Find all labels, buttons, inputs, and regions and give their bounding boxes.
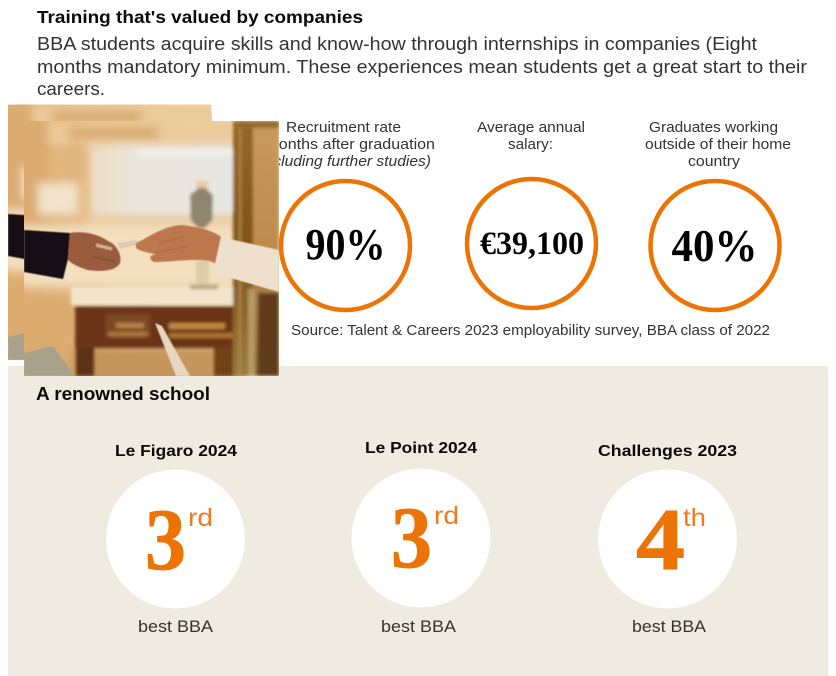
intro paragraph: months mandatory minimum. These experiences mean students get a great start to their (37, 56, 807, 77)
intro paragraph (37, 33, 807, 99)
stat circle: salary: €39,100 (480, 226, 584, 262)
photo: back layer (8, 104, 212, 360)
stat label: recruitment rate: (including further studies) (256, 154, 431, 170)
ranking: Challenges 2023: Challenges 2023 (598, 443, 737, 460)
ranking: Le Figaro 2024 (106, 443, 245, 636)
stat label: graduates abroad (645, 120, 791, 170)
ranking: Challenges 2023 (598, 443, 737, 636)
ranking: Le Figaro 2024: 3 (145, 492, 186, 589)
ranking: Le Figaro 2024: rd (188, 504, 213, 532)
ranking: Le Point 2024 (352, 440, 490, 636)
stat label: graduates abroad: country (688, 154, 741, 170)
panel: a renowned school (8, 366, 828, 676)
ranking: Challenges 2023: 4 (636, 492, 685, 589)
stat label: graduates abroad: Graduates working (649, 120, 778, 136)
stat label: recruitment rate (252, 120, 435, 170)
stat label: recruitment rate: 6 months after graduation (252, 137, 435, 153)
stat label: graduates abroad: outside of their home (645, 137, 791, 153)
intro paragraph: careers. (37, 78, 105, 99)
ranking: Le Figaro 2024: best BBA (138, 617, 214, 636)
stat circle: 90% (281, 181, 410, 310)
stat circle: salary (467, 179, 596, 308)
stat circle: 40%: 40% (672, 220, 758, 271)
ranking: Le Point 2024: Le Point 2024 (365, 440, 477, 457)
stat label: average annual salary: salary: (508, 137, 553, 153)
heading: renowned school: A renowned school (36, 384, 210, 404)
ranking: Le Figaro 2024: Le Figaro 2024 (115, 443, 237, 460)
intro paragraph: BBA students acquire skills and know-how through internships in companies (Eight (37, 33, 757, 54)
ranking: Le Point 2024: 3 (391, 490, 432, 587)
ranking: Le Point 2024: best BBA (381, 617, 457, 636)
ranking: Challenges 2023: best BBA (632, 617, 707, 636)
stat circle: 40% (650, 181, 780, 310)
ranking: Le Point 2024: rd (434, 502, 459, 530)
stat circle: 90%: 90% (306, 220, 386, 269)
photo: handing over a business card (18, 121, 279, 387)
stat label: recruitment rate: Recruitment rate (286, 120, 401, 136)
stat label: average annual salary (477, 120, 585, 153)
ranking: Challenges 2023: th (683, 504, 706, 532)
heading: training: Training that's valued by companies (37, 7, 363, 27)
source note: Source: Talent & Careers 2023 employability survey, BBA class of 2022 (291, 323, 770, 339)
stat label: average annual salary: Average annual (477, 120, 585, 136)
